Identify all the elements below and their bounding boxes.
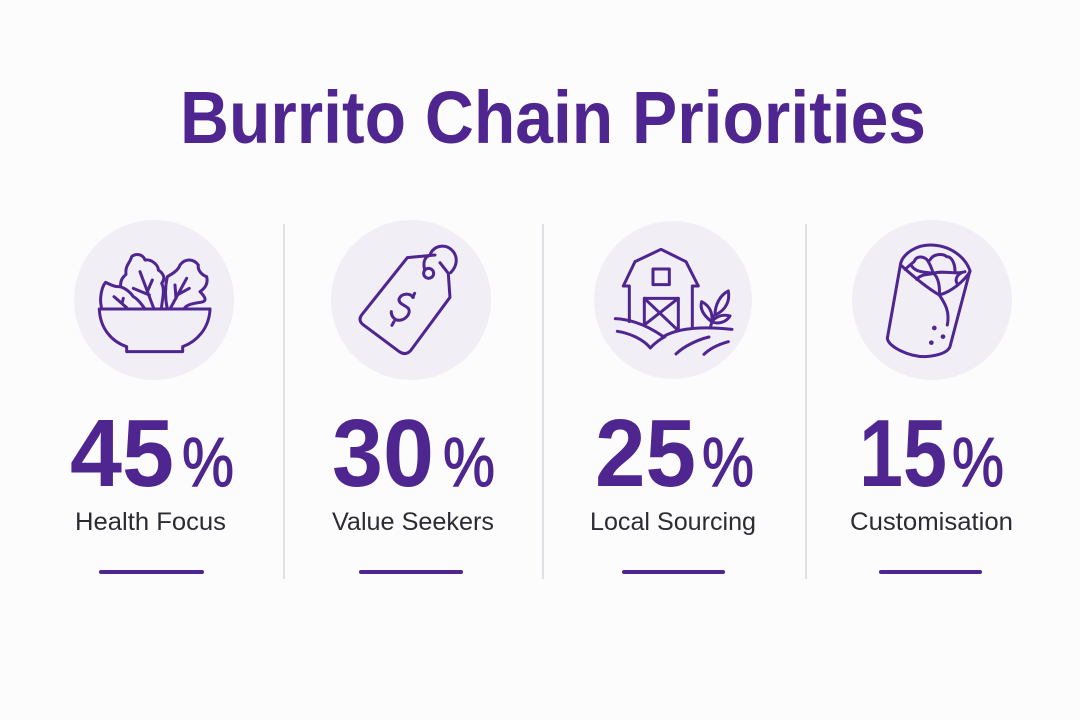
label: customisation: Customisation <box>850 508 1013 536</box>
icon: price tag <box>331 220 491 380</box>
accent line <box>99 570 204 574</box>
stat: 25% <box>595 400 754 507</box>
icon: burrito <box>852 220 1012 380</box>
panel: customisation <box>850 220 1013 574</box>
panel: health focus <box>70 220 234 574</box>
stat: 30%: 30 <box>332 400 434 507</box>
stat: 45%: 45 <box>70 400 174 507</box>
icon: barn and fields <box>594 221 752 379</box>
label: value seekers: Value Seekers <box>332 508 494 536</box>
stat: 15%: 15 <box>859 400 947 507</box>
stat: 45% <box>70 400 234 507</box>
stat: 30%: % <box>443 423 495 501</box>
stat: 30% <box>332 400 495 507</box>
accent line <box>622 570 725 574</box>
panel: local sourcing <box>590 221 756 574</box>
accent line <box>359 570 463 574</box>
stat: 15%: % <box>952 423 1004 501</box>
label: local sourcing: Local Sourcing <box>590 508 756 536</box>
stat: 25%: 25 <box>595 400 696 507</box>
icon: salad bowl <box>74 220 234 380</box>
title: Burrito Chain Priorities <box>180 76 926 159</box>
accent line <box>879 570 982 574</box>
label: health focus: Health Focus <box>75 508 226 536</box>
stat: 45%: % <box>182 423 234 501</box>
stat: 25%: % <box>702 423 754 501</box>
panel: value seekers <box>331 220 495 574</box>
